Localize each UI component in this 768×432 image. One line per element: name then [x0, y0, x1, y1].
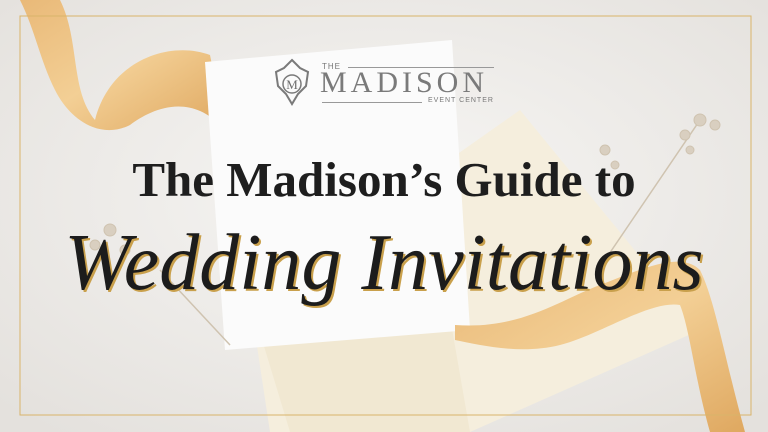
logo text: THE: [322, 62, 341, 71]
envelope: [250, 110, 700, 432]
logo: EVENT CENTER: [428, 97, 494, 104]
script subtitle: Wedding Invitations: [64, 219, 704, 307]
logo: MADISON: [320, 66, 488, 99]
icon: crest: [274, 58, 310, 106]
icon: crest: M: [286, 77, 298, 92]
logo: [274, 58, 494, 106]
flowers: [90, 114, 720, 345]
ribbon left: [20, 0, 225, 130]
ribbon right: [455, 262, 745, 432]
card: [205, 40, 470, 350]
title: The Madison’s Guide to: [132, 152, 636, 207]
